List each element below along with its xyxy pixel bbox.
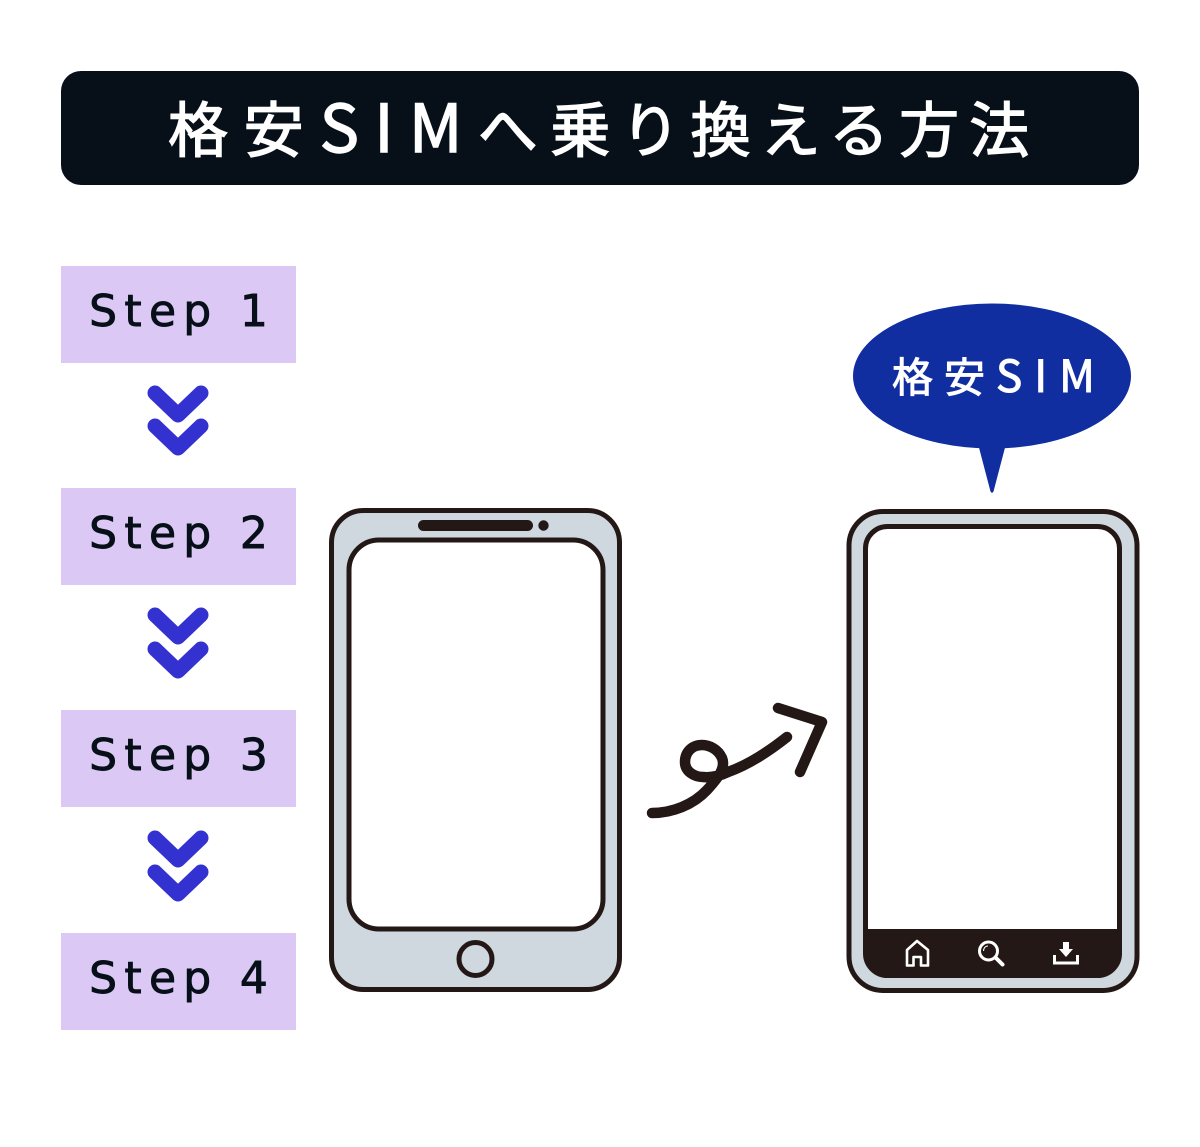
step 2 box: Step 2: [89, 508, 275, 559]
icon: double chevron 3: [155, 838, 201, 894]
icon: double chevron 1: [155, 393, 201, 448]
title banner: 格安SIMへ乗り換える方法: [168, 76, 1039, 172]
step 3 box: Step 3: [89, 730, 275, 781]
step 3 box: [61, 710, 296, 807]
step 4 box: Step 4: [89, 953, 275, 1004]
icon: download: [1053, 942, 1079, 964]
new phone: [849, 512, 1137, 990]
curly arrow: [652, 708, 822, 813]
old phone: [332, 510, 620, 990]
title banner: [61, 71, 1139, 185]
bubble label: 格安SIM: [892, 341, 1107, 405]
step 1 box: [61, 266, 296, 363]
bottom navigation bar: [868, 929, 1117, 978]
icon: double chevron 2: [155, 615, 201, 671]
icon: home: [907, 941, 928, 966]
step 2 box: [61, 488, 296, 585]
speech bubble: [853, 304, 1131, 493]
step 4 box: [61, 933, 296, 1030]
step 1 box: Step 1: [89, 286, 275, 337]
icon: search: [980, 942, 1002, 964]
